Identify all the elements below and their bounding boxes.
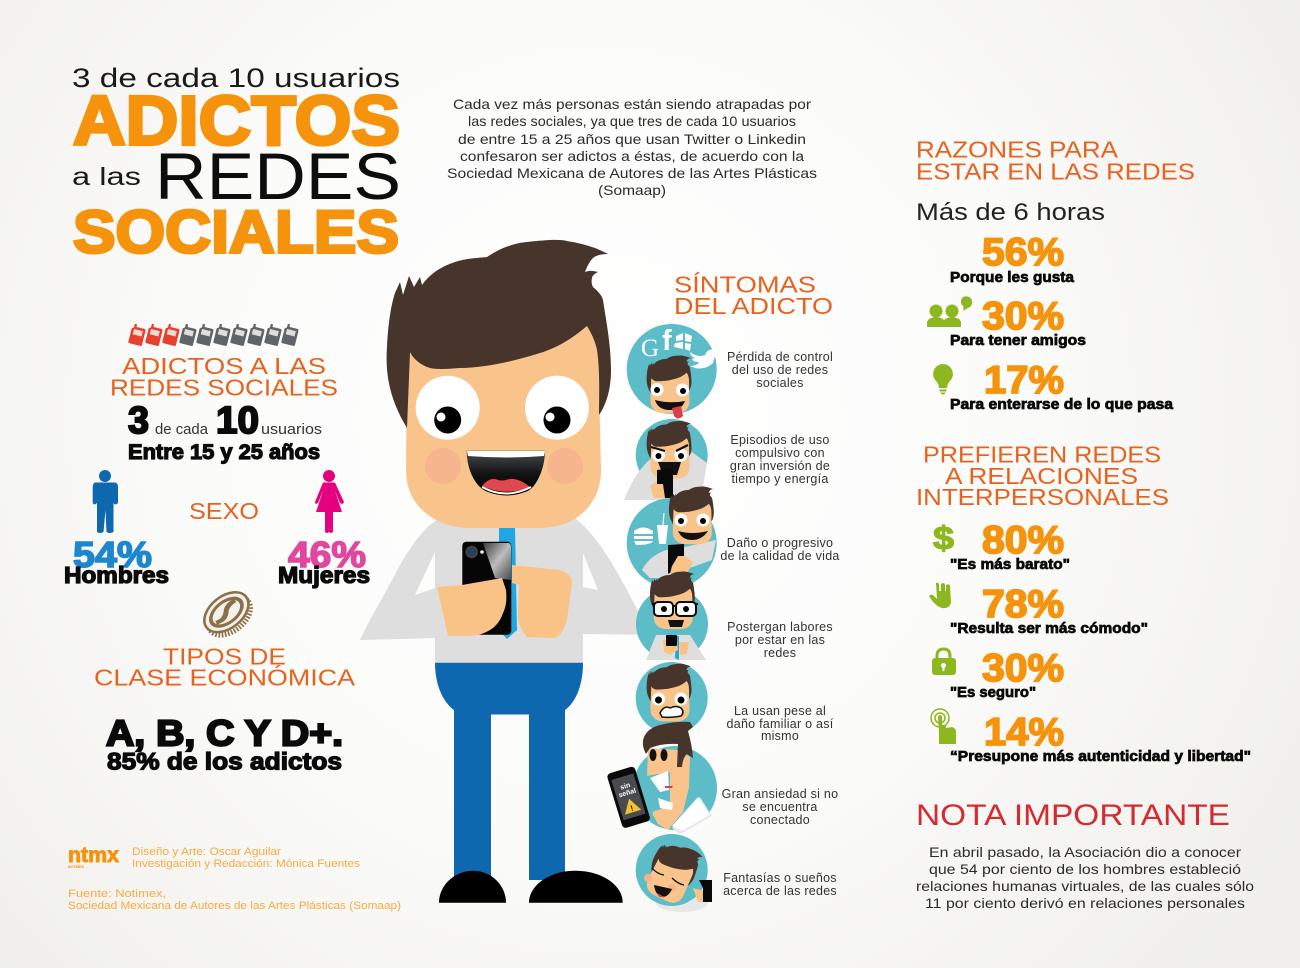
stat: clases economicas: [106, 712, 343, 776]
shoes: [439, 871, 623, 903]
icon: woman: [315, 470, 344, 533]
stat: mujeres: [278, 534, 370, 588]
stat: hombres: 54%: [73, 534, 152, 575]
no signal phone: [606, 766, 651, 829]
stat: 56%: 56%: [982, 231, 1064, 274]
heading: adictos a las redes sociales: ADICTOS A LAS: [122, 353, 326, 379]
intro paragraph: (Somaap): [598, 183, 666, 198]
icon: symptom 7 fantasies: [636, 834, 712, 912]
stat: clases economicas: 85% de los adictos: [107, 748, 342, 776]
intro paragraph: Sociedad Mexicana de Autores de las Artes Plásticas: [447, 166, 817, 181]
intro paragraph: confesaron ser adictos a éstas, de acuerdo con la: [460, 149, 804, 164]
icon row: phones 3 of 10: [128, 323, 300, 346]
stat: 14%: 14%: [984, 711, 1064, 754]
text: nota paragraph: que 54 por ciento de los hombres estableció: [929, 861, 1241, 877]
heading: adictos a las redes sociales: [110, 353, 338, 400]
credits: Fuente: Notimex,: [68, 888, 166, 900]
subheading: mas de 6 horas: Más de 6 horas: [916, 199, 1105, 226]
text: nota paragraph: 11 por ciento derivó en relaciones personales: [925, 895, 1245, 911]
heading: sintomas del adicto: SÍNTOMAS: [674, 272, 816, 298]
icon: symptom 2 compulsive use: [624, 419, 708, 500]
heading: sintomas del adicto: [674, 272, 833, 319]
heading: razones para estar en las redes: ESTAR EN LAS REDES: [916, 158, 1195, 184]
label: symptom 7: Fantasías o sueños: [723, 871, 837, 885]
label: symptom 1: Pérdida de control: [727, 350, 833, 364]
text: nota paragraph: En abril pasado, la Asociación dio a conocer: [929, 844, 1241, 860]
label: symptom 7: acerca de las redes: [723, 884, 837, 898]
label: symptom 7: [723, 871, 837, 898]
stat: 3 de cada 10: 10: [216, 400, 259, 442]
stat: 14%: [950, 711, 1251, 765]
label: symptom 4: Postergan labores: [727, 620, 833, 634]
head: [387, 240, 611, 528]
heading: prefieren redes: A RELACIONES: [945, 463, 1138, 489]
label: symptom 2: gran inversión de: [730, 459, 830, 473]
stat: 3 de cada 10: de cada: [155, 422, 209, 438]
heading: prefieren redes: [916, 442, 1169, 510]
title: REDES: [155, 139, 401, 213]
heading: razones para estar en las redes: [916, 136, 1195, 184]
label: symptom 4: [727, 620, 833, 660]
credits: Diseño y Arte: Oscar Aguilar: [132, 846, 281, 858]
stat: 3 de cada 10: [128, 400, 322, 464]
icon: coin: [197, 584, 258, 643]
stat: hombres: [64, 534, 169, 588]
stat: 30% seguro: 30%: [982, 647, 1064, 690]
intro paragraph: Cada vez más personas están siendo atrapadas por: [453, 97, 811, 112]
label: symptom 2: compulsivo con: [735, 446, 825, 460]
mouth: [467, 451, 545, 496]
label: symptom 6: se encuentra: [742, 800, 818, 814]
character: main figure: [360, 240, 650, 903]
icon: symptom 6 anxiety: [606, 722, 717, 834]
stat: 78%: [950, 583, 1148, 637]
stat: 3 de cada 10: 3: [128, 400, 149, 442]
credits: Sociedad Mexicana de Autores de las Artes Plásticas (Somaap): [68, 900, 401, 912]
heading: prefieren redes: INTERPERSONALES: [916, 484, 1169, 510]
stat: 17%: Para enterarse de lo que pasa: [950, 397, 1174, 413]
label: symptom 2: tiempo y energía: [731, 472, 829, 486]
label: symptom 3: Daño o progresivo: [727, 536, 833, 550]
logo: ntmx: ntmx: [68, 844, 119, 867]
stat: 80%: 80%: [982, 519, 1064, 562]
intro paragraph: de entre 15 a 25 años que usan Twitter o Linkedin: [458, 132, 806, 147]
shirt and arms: [360, 518, 650, 663]
title: ADICTOS: [73, 82, 400, 160]
phone: [462, 542, 511, 635]
no signal phone: !: [629, 804, 635, 813]
stat: 80%: "Es más barato": [950, 557, 1070, 573]
label: symptom 6: Gran ansiedad si no: [722, 787, 838, 801]
credits: Investigación y Redacción: Mónica Fuentes: [132, 858, 360, 870]
stat: 3 de cada 10: Entre 15 y 25 años: [128, 441, 320, 464]
title: a las: [72, 163, 141, 191]
title: 3 de cada 10 usuarios: [72, 63, 400, 93]
stat: 30% amigos: Para tener amigos: [950, 333, 1086, 349]
label: symptom 5: mismo: [761, 729, 799, 743]
label: symptom 3: [720, 536, 840, 563]
stat: 30% amigos: 30%: [982, 295, 1064, 338]
icon: padlock: [932, 649, 956, 675]
icon: symptom 1 loss of control: [627, 324, 719, 418]
stat: 30% seguro: [950, 647, 1064, 701]
label: symptom 1: del uso de redes: [732, 363, 828, 377]
icon: symptom 3 quality of life: [627, 486, 717, 588]
icon: symptom 5 family damage: [636, 662, 708, 734]
arm gaps: [415, 552, 598, 595]
title: SOCIALES: [73, 198, 399, 266]
logo: ntmx: NOTIMEX: [68, 865, 85, 869]
stat: 56%: [950, 231, 1075, 286]
stat: 30% seguro: "Es seguro": [950, 685, 1036, 701]
stat: clases economicas: A, B, C Y D+.: [106, 712, 343, 754]
stat: 3 de cada 10: usuarios: [261, 422, 322, 438]
heading: nota importante: NOTA IMPORTANTE: [916, 799, 1230, 832]
label: symptom 2: [730, 433, 830, 486]
icon: dollar: $: [933, 520, 954, 556]
heading: sexo: SEXO: [189, 498, 259, 524]
label: symptom 2: Episodios de uso: [730, 433, 830, 447]
icon: symptom 1 loss of control: G: [641, 335, 659, 362]
heading: tipos de clase economica: TIPOS DE: [163, 644, 286, 670]
intro paragraph: las redes sociales, ya que tres de cada 10 usuarios: [468, 114, 796, 129]
eyes: [416, 376, 589, 440]
stat: 78%: 78%: [982, 583, 1064, 626]
stat: 80%: [950, 519, 1070, 573]
stat: mujeres: Mujeres: [278, 562, 370, 588]
icon: touch: [931, 709, 956, 744]
heading: sintomas del adicto: DEL ADICTO: [674, 293, 833, 319]
icon: friends: [927, 296, 972, 327]
icon: man: [93, 470, 118, 533]
label: symptom 6: conectado: [750, 813, 810, 827]
icon: symptom 4 postponing work: [636, 571, 708, 660]
label: symptom 5: La usan pese al: [734, 704, 826, 718]
hand right: [512, 565, 572, 638]
no signal phone: sin: [620, 782, 631, 792]
stat: 14%: “Presupone más autenticidad y libertad": [950, 749, 1251, 765]
text: nota paragraph: relaciones humanas virtuales, de las cuales sólo: [916, 878, 1254, 894]
tie: [499, 528, 517, 639]
stat: hombres: Hombres: [64, 562, 169, 588]
title: [72, 63, 401, 266]
hand left: [437, 578, 506, 636]
label: symptom 5: [727, 704, 834, 743]
cheeks: [425, 448, 583, 484]
stat: 17%: 17%: [984, 359, 1064, 402]
stat: 17%: [950, 359, 1174, 413]
label: symptom 4: redes: [764, 646, 796, 660]
label: symptom 6: [722, 787, 838, 827]
stat: mujeres: 46%: [288, 534, 366, 575]
pants: [435, 663, 583, 880]
stat: 56%: Porque les gusta: [950, 270, 1075, 286]
label: symptom 4: por estar en las: [735, 633, 825, 647]
label: symptom 5: daño familiar o así: [727, 717, 834, 731]
heading: razones para estar en las redes: RAZONES PARA: [916, 136, 1119, 162]
credits: [68, 846, 401, 912]
label: symptom 1: sociales: [756, 376, 804, 390]
icon: symptom 1 loss of control: f: [662, 325, 672, 357]
text: nota paragraph: [916, 844, 1254, 911]
heading: adictos a las redes sociales: REDES SOCIALES: [110, 374, 338, 400]
label: symptom 1: [727, 350, 833, 390]
heading: prefieren redes: PREFIEREN REDES: [923, 442, 1161, 468]
heading: tipos de clase economica: [94, 644, 356, 690]
icon: light bulb: [933, 364, 953, 394]
intro paragraph: [447, 97, 817, 198]
label: symptom 3: de la calidad de vida: [720, 549, 840, 563]
no signal phone: señal: [618, 788, 637, 799]
heading: tipos de clase economica: CLASE ECONÓMICA: [94, 664, 356, 690]
icon: hand: [929, 583, 951, 608]
stat: 78%: "Resulta ser más cómodo": [950, 621, 1148, 637]
stat: 30% amigos: [950, 295, 1086, 349]
